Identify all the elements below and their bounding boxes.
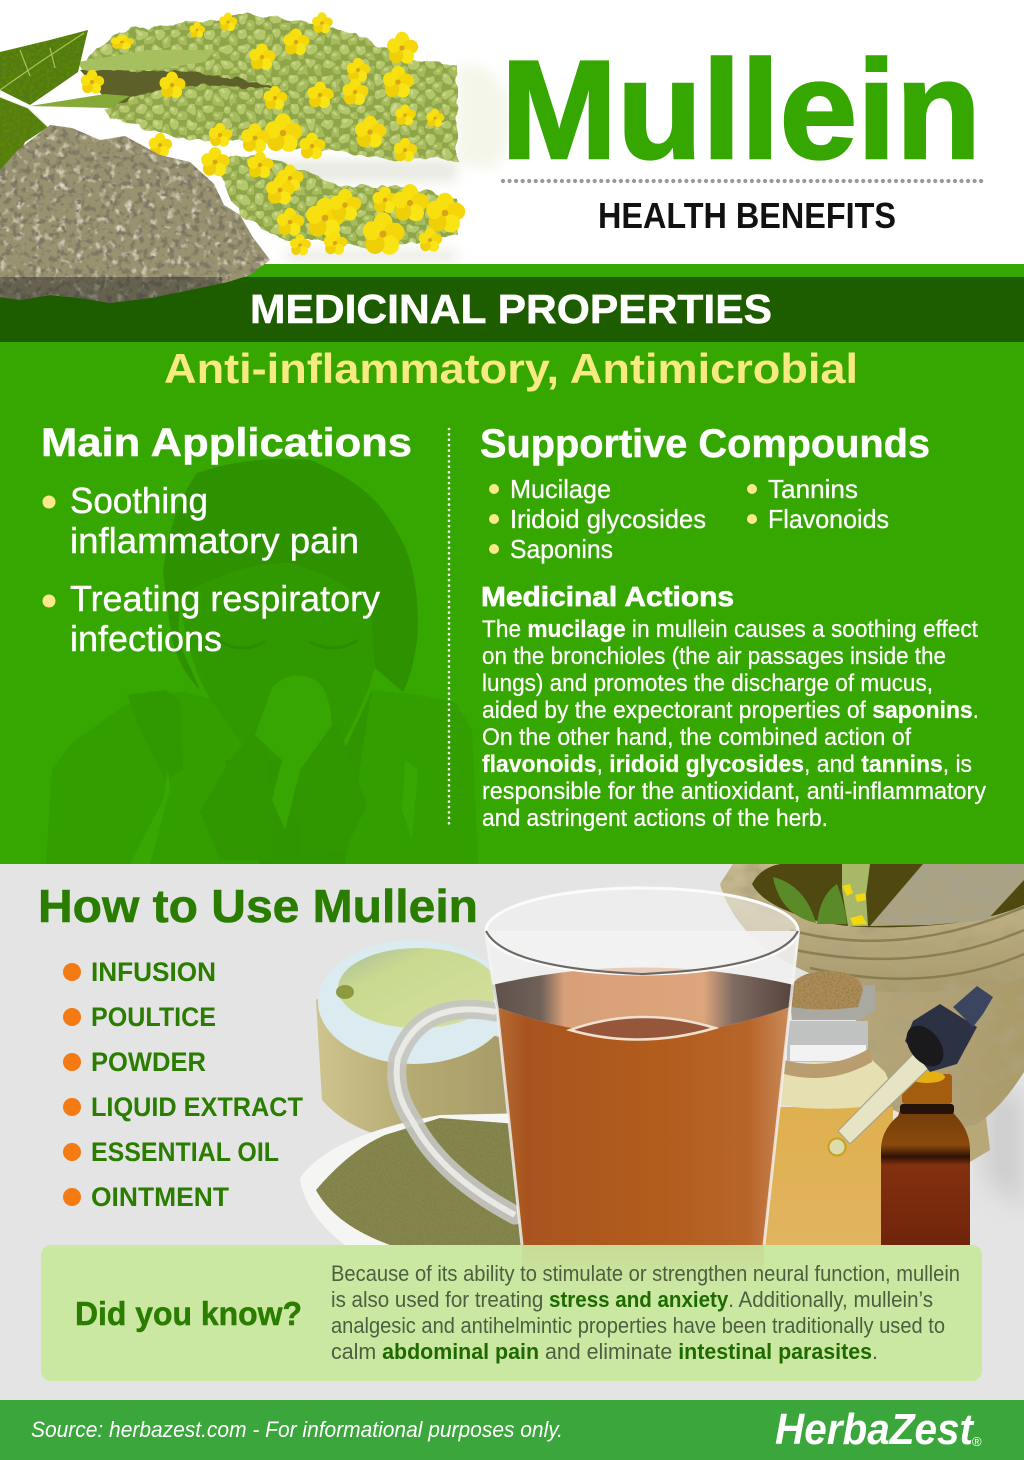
mortar and pestle [720, 864, 1024, 1162]
list: applications: Treating respiratory [70, 578, 380, 619]
list: applications: Soothing [70, 480, 208, 521]
hair [163, 459, 418, 692]
list: forms of use: INFUSION [91, 957, 216, 987]
callout heading: Did you know? [75, 1295, 302, 1332]
face [180, 563, 375, 790]
cap opening [899, 1019, 951, 1073]
list: compounds: Mucilage [510, 474, 611, 504]
text: medicinal actions paragraph: aided by the expectorant properties of saponins. [482, 697, 979, 724]
pestle [870, 864, 1024, 926]
top green stripe [0, 264, 1024, 277]
rope [784, 1048, 872, 1078]
list: compounds: Iridoid glycosides [510, 504, 706, 534]
heading: how to use mullein: How to Use Mullein [38, 880, 478, 932]
text: medicinal actions paragraph: on the bronchioles (the air passages inside the [482, 643, 946, 670]
glass rim [486, 888, 798, 974]
text: medicinal actions paragraph: The mucilage in mullein causes a soothing effect [482, 616, 978, 643]
mortar base [950, 1117, 990, 1162]
dropper bulb [953, 986, 993, 1027]
tea showing through callout [522, 1245, 764, 1290]
dark gap between spikes [80, 65, 280, 125]
glass edge highlight [486, 935, 798, 1245]
pipette [838, 1054, 930, 1144]
surface meniscus [570, 1017, 715, 1040]
cork [792, 971, 863, 1010]
list: forms of use: POWDER [91, 1047, 206, 1077]
oil drop [828, 1138, 846, 1156]
panel: how to use mullein [0, 864, 1024, 1400]
list: forms of use: ESSENTIAL OIL [91, 1137, 279, 1167]
herb leaves [773, 877, 847, 924]
dried mullein pile [0, 125, 270, 305]
leaf: lower [0, 97, 48, 172]
text: medicinal actions paragraph: On the other hand, the combined action of [482, 724, 911, 751]
top spike stem [78, 50, 215, 70]
shadow under spikes [250, 160, 457, 262]
middle flower spike [105, 85, 457, 160]
tissue [255, 676, 332, 830]
list: applications [42, 480, 380, 659]
text: medicinal actions paragraph: and astringent actions of the herb. [482, 805, 828, 832]
list: compounds [489, 474, 889, 564]
top flower spike [85, 14, 457, 100]
dotted divider [503, 179, 982, 183]
text: medicinal actions paragraph: flavonoids, iridoid glycosides, and tannins, is [482, 751, 972, 778]
powder bowl [300, 1113, 530, 1245]
list: applications: infections [70, 618, 222, 659]
mortar interior [752, 864, 1024, 927]
chest shadow [225, 690, 372, 864]
leaf: upper [0, 30, 88, 105]
callout text: Because of its ability to stimulate or strengthen neural function, mullein [331, 1261, 960, 1286]
footer [0, 1400, 1024, 1460]
dotted column divider [448, 429, 450, 828]
heading: medicinal actions: Medicinal Actions [481, 581, 734, 612]
registered mark: ® [972, 1434, 982, 1449]
pile shadow inside band [0, 277, 222, 305]
woman blowing nose silhouette [46, 459, 478, 864]
soft shadows on background [985, 1080, 1024, 1210]
lower flower spike [210, 156, 457, 248]
dropper and essential oil bottle [828, 986, 993, 1250]
mortar body [850, 960, 1024, 1130]
text: medicinal actions paragraph: responsible for the antioxidant, anti-inflammatory [482, 778, 986, 805]
honey oil jar [760, 971, 893, 1250]
subtitle: HEALTH BENEFITS [598, 195, 896, 236]
list: applications: inflammatory pain [70, 520, 359, 561]
text: medicinal actions paragraph [482, 616, 986, 832]
callout text: is also used for treating stress and anxiety. Additionally, mullein’s [331, 1287, 933, 1312]
panel: medicinal properties [0, 342, 1024, 864]
list: compounds: Saponins [510, 534, 613, 564]
heading: supportive compounds: Supportive Compounds [480, 422, 930, 466]
ointment jar [316, 940, 510, 1140]
heading: medicinal properties: MEDICINAL PROPERTIES [250, 286, 772, 332]
mortar rim [720, 864, 1024, 992]
collar [127, 690, 183, 780]
dropper cap [905, 1004, 977, 1072]
callout: did you know [41, 1245, 982, 1381]
text: medicinal actions paragraph: lungs) and promotes the discharge of mucus, [482, 670, 933, 697]
logo: HerbaZest: HerbaZest [775, 1405, 975, 1454]
yellow flowers [81, 12, 465, 255]
jar neck [787, 1021, 868, 1062]
empty glass body [485, 931, 800, 1007]
callout text: analgesic and antihelmintic properties have been traditionally used to [331, 1313, 945, 1338]
list: forms of use: POULTICE [91, 1002, 216, 1032]
medicinal properties subtitle: Anti-inflammatory, Antimicrobial [164, 345, 858, 392]
mullein sprig [842, 864, 870, 926]
list: forms of use [63, 957, 303, 1212]
list: compounds: Flavonoids [768, 504, 889, 534]
right collar highlight [402, 760, 418, 840]
glass tea mug [397, 888, 800, 1245]
heading: main applications: Main Applications [41, 421, 412, 465]
glass handle [397, 1009, 515, 1215]
hands [200, 690, 367, 860]
callout text: calm abdominal pain and eliminate intestinal parasites. [331, 1339, 878, 1364]
middle spike stem [30, 94, 130, 108]
callout text [331, 1261, 960, 1364]
list: forms of use: OINTMENT [91, 1182, 229, 1212]
list: compounds: Tannins [768, 474, 858, 504]
bottle [881, 1104, 970, 1250]
hero image: mullein flower spikes [0, 12, 511, 262]
woman's body [46, 690, 478, 864]
faded ghost of flower spikes behind title [457, 64, 511, 169]
source note: Source: herbazest.com - For informational purposes only. [31, 1417, 563, 1442]
mortar rim bands [790, 907, 1024, 979]
list: forms of use: LIQUID EXTRACT [91, 1092, 303, 1122]
closed eyes [218, 640, 358, 648]
tea surface [492, 968, 794, 1034]
medicinal properties band [0, 277, 1024, 342]
tea [497, 1007, 790, 1245]
title: Mullein [501, 31, 981, 188]
